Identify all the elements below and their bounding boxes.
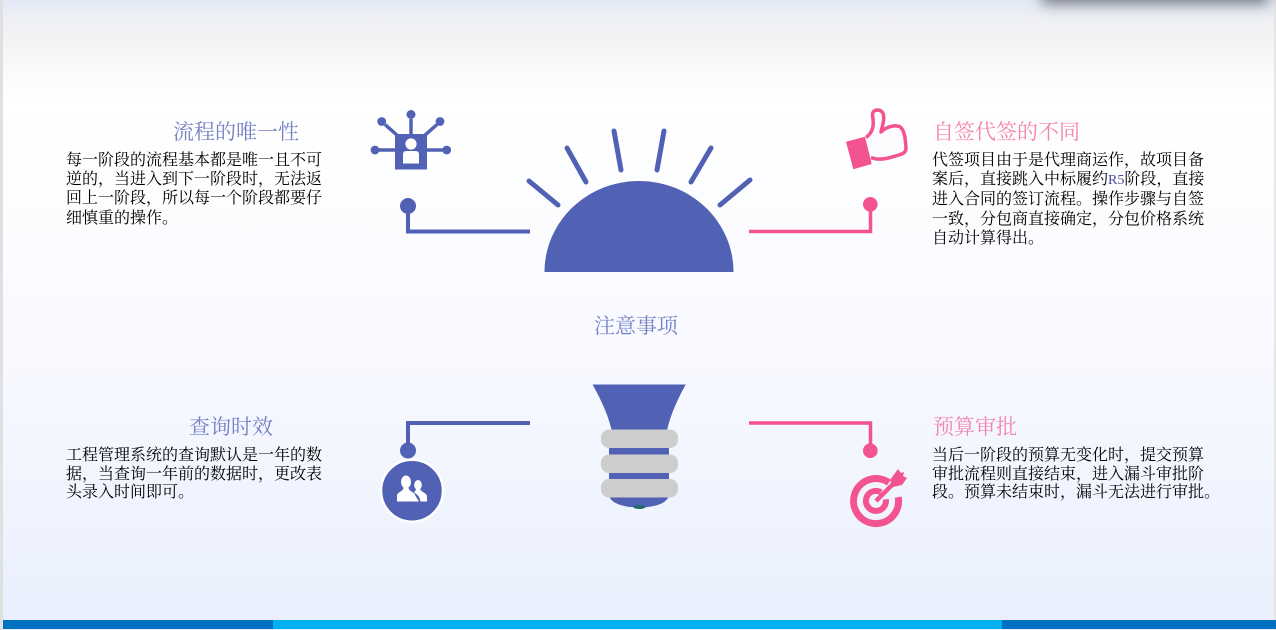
- connector: top right: [749, 197, 878, 232]
- text block: [932, 446, 1220, 501]
- text block: 细慎重的操作。: [66, 210, 178, 227]
- text block: 回上一阶段，所以每一个阶段都要仔: [66, 190, 322, 207]
- bulb base: [592, 384, 686, 509]
- text block: 自动计算得出。: [932, 230, 1044, 247]
- center heading: 注意事项: [594, 314, 678, 338]
- text block: 进入合同的签订流程。操作步骤与自签: [932, 191, 1204, 208]
- text block: 案后，直接跳入中标履约R5阶段，直接: [932, 171, 1204, 188]
- text block: 段。预算未结束时，漏斗无法进行审批。: [932, 484, 1220, 501]
- right edge strip: [1274, 0, 1276, 630]
- panel: uniqueness of process: [66, 120, 322, 227]
- text block: 一致，分包商直接确定，分包价格系统: [932, 211, 1204, 228]
- panel: budget approval: [932, 415, 1220, 501]
- text block: [66, 151, 322, 227]
- text block: 代签项目由于是代理商运作，故项目备: [932, 152, 1204, 169]
- connector: bottom right: [749, 423, 878, 458]
- text block: 工程管理系统的查询默认是一年的数: [66, 447, 322, 464]
- text block: 头录入时间即可。: [66, 484, 194, 501]
- heading: 预算审批: [933, 415, 1017, 439]
- bar segment right: [1002, 620, 1276, 629]
- text block: 每一阶段的流程基本都是唯一且不可: [66, 152, 322, 169]
- bottom colour bar: [3, 620, 1276, 629]
- icon: network person: [371, 110, 451, 170]
- connector: top left: [400, 198, 530, 232]
- panel: self-sign vs proxy-sign: [932, 120, 1204, 247]
- panel: query time limit: [66, 415, 322, 501]
- text block: 审批流程则直接结束，进入漏斗审批阶: [932, 466, 1204, 483]
- text block: 据，当查询一年前的数据时，更改表: [66, 466, 322, 483]
- sun dome: [544, 181, 734, 272]
- connector: bottom left: [400, 423, 530, 458]
- bar segment left: [3, 620, 273, 629]
- sun rays: [529, 131, 750, 205]
- text block: [932, 151, 1204, 247]
- heading: 查询时效: [189, 415, 273, 439]
- text block: 逆的，当进入到下一阶段时，无法返: [66, 171, 322, 188]
- left edge strip: [0, 0, 3, 630]
- heading: 自签代签的不同: [933, 120, 1080, 144]
- icon: target with arrow: [854, 469, 907, 524]
- text block: 当后一阶段的预算无变化时，提交预算: [932, 447, 1204, 464]
- heading: 流程的唯一性: [173, 120, 299, 144]
- text block: [66, 446, 322, 501]
- icon: thumbs up: [846, 110, 906, 169]
- icon: people badge: [381, 460, 443, 522]
